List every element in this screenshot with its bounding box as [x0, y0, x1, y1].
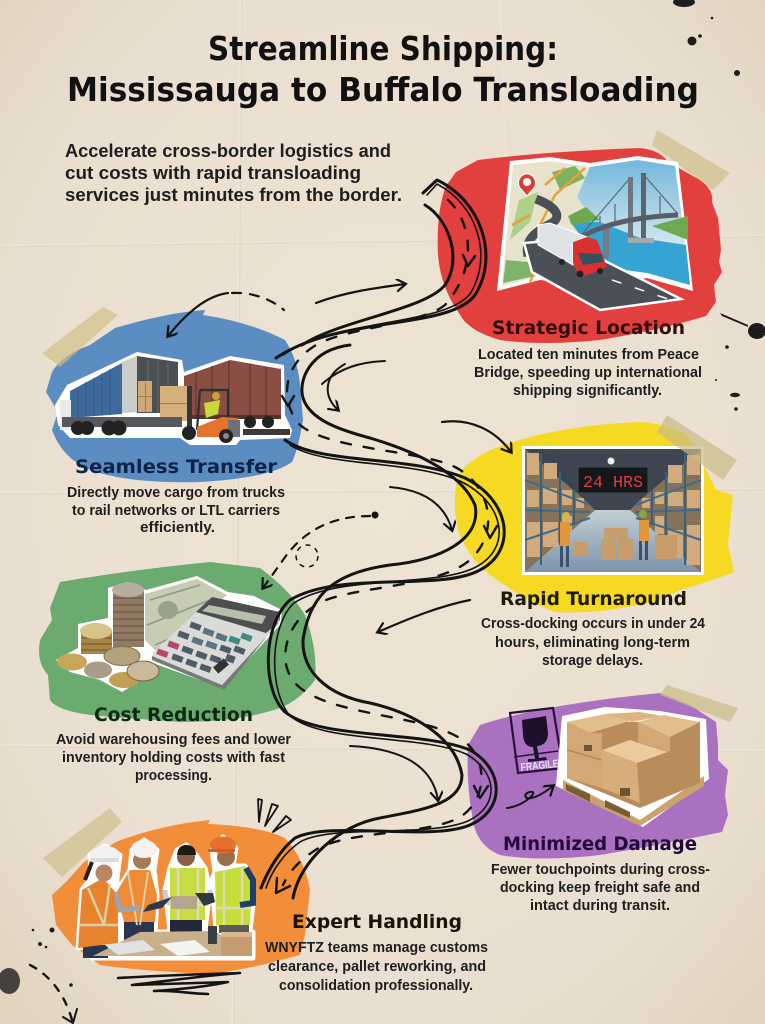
panel: seamless transfer [42, 307, 303, 536]
arrow: swirl [328, 364, 345, 410]
description: Avoid warehousing fees and lower [56, 732, 291, 748]
table [93, 931, 252, 956]
heading: Strategic Location [492, 317, 685, 339]
description [491, 862, 710, 914]
icon: fragile sign: FRAGILE [520, 758, 559, 774]
worker one [78, 846, 120, 958]
green paint blob [39, 562, 316, 722]
red paint blob [438, 148, 722, 343]
panel: expert handling [43, 799, 488, 994]
description: Directly move cargo from trucks [67, 485, 285, 501]
description: consolidation professionally. [279, 978, 473, 994]
description: docking keep freight safe and [500, 880, 700, 896]
icon: coins, bills and calculator [56, 576, 282, 692]
description: to rail networks or LTL carriers [72, 503, 280, 519]
description: Cross-docking occurs in under 24 [481, 616, 705, 632]
map pin [518, 174, 536, 196]
description [474, 347, 702, 399]
worker two [116, 840, 157, 940]
description: storage delays. [542, 653, 643, 669]
arrow: mid curve [390, 487, 452, 530]
winding road [261, 180, 504, 898]
arrow: small curve down [322, 361, 385, 384]
heading: Cost Reduction [94, 704, 253, 726]
description: shipping significantly. [513, 383, 662, 399]
scribble underline [118, 973, 240, 994]
icon: fragile sign [510, 708, 563, 774]
tape [43, 808, 122, 877]
road edge: outer sweep [261, 440, 504, 888]
arrow: to yellow panel [442, 421, 511, 452]
panel: minimized damage [468, 685, 738, 914]
description: Located ten minutes from Peace [478, 347, 699, 363]
heading: Minimized Damage [503, 833, 697, 855]
description: processing. [135, 768, 212, 784]
purple paint blob [468, 693, 728, 858]
title: Mississauga to Buffalo Transloading [67, 70, 699, 109]
icon: four workers around table [78, 836, 253, 958]
description: clearance, pallet reworking, and [268, 959, 486, 975]
warehouse photo: 24 HRS [583, 474, 643, 493]
description [481, 616, 705, 669]
truck [538, 223, 587, 265]
description: Fewer touchpoints during cross- [491, 862, 710, 878]
tape [660, 685, 738, 722]
tape [42, 307, 118, 367]
warehouse photo [522, 446, 704, 575]
description [56, 732, 291, 784]
description: efficiently. [140, 520, 215, 536]
arrow: dashed to blue panel [168, 293, 284, 336]
heading: Expert Handling [292, 911, 462, 933]
arrow: dashed to green panel [263, 512, 378, 588]
tape [657, 415, 737, 480]
icon: boxes on pallet [556, 707, 709, 827]
dashed arrow bottom left [30, 965, 77, 1023]
white sticker outline [78, 837, 253, 958]
tape [652, 130, 730, 190]
worker four [208, 836, 253, 933]
icon: truck, rail car and forklift [55, 352, 292, 445]
description [265, 940, 488, 994]
intro text: services just minutes from the border. [65, 184, 402, 205]
description [67, 485, 285, 536]
description: inventory holding costs with fast [62, 750, 285, 766]
intro text [65, 140, 402, 205]
road edge: upper outer [276, 180, 486, 358]
title: Streamline Shipping: [208, 29, 558, 68]
road edge: upper inner [302, 205, 453, 345]
panel: rapid turnaround [455, 415, 737, 669]
panel: strategic location [438, 130, 730, 399]
direction arrowheads [276, 255, 497, 893]
road edge: inner sweep [293, 345, 476, 898]
blue paint blob [46, 310, 303, 482]
description: WNYFTZ teams manage customs [265, 940, 488, 956]
description: hours, eliminating long-term [495, 635, 690, 651]
intro text: Accelerate cross-border logistics and [65, 140, 391, 161]
heading: Seamless Transfer [75, 456, 278, 478]
intro text: cut costs with rapid transloading [65, 162, 361, 183]
description: Bridge, speeding up international [474, 365, 702, 381]
heading: Rapid Turnaround [500, 588, 687, 610]
road centre dashes [283, 200, 488, 885]
panel: cost reduction [39, 562, 316, 784]
title [67, 29, 699, 109]
description: intact during transit. [530, 898, 670, 914]
road [527, 199, 557, 256]
emphasis ticks [258, 799, 291, 832]
icon: map with bridge and truck [497, 156, 693, 310]
arrow: lower curve [350, 746, 438, 800]
yellow paint blob [455, 422, 734, 612]
arrow: loop to boxes [507, 786, 553, 808]
arrow: top swoop [316, 284, 405, 303]
worker three [165, 845, 210, 932]
orange paint blob [52, 820, 310, 974]
arrow: leftward [378, 600, 470, 632]
